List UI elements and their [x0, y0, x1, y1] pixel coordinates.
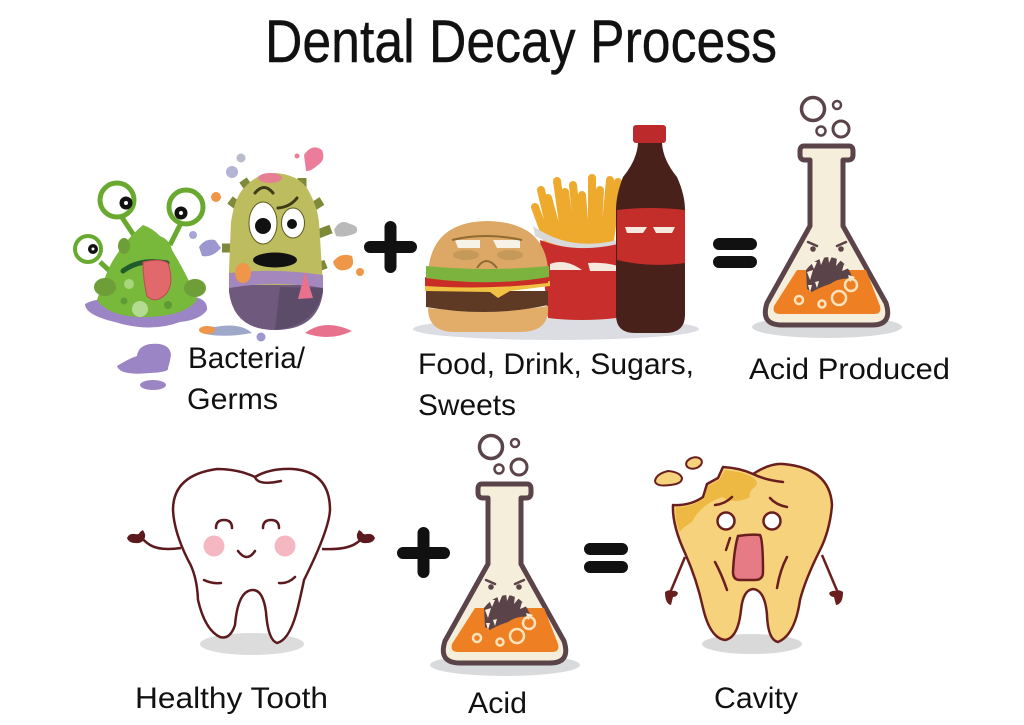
label: food, drink, sugars, sweets — [418, 348, 694, 422]
illustration: olive germ — [117, 147, 364, 390]
icon: plus sign — [370, 227, 411, 267]
title: Dental Decay Process — [265, 8, 777, 75]
illustration: healthy tooth — [127, 469, 375, 655]
label: acid: Acid — [468, 687, 527, 720]
label: cavity: Cavity — [714, 682, 798, 715]
label: acid produced: Acid Produced — [749, 353, 950, 386]
illustration: acid flask — [430, 436, 580, 676]
label: bacteria / germs: Germs — [187, 383, 278, 416]
illustration: cavity tooth — [655, 456, 843, 654]
illustration: acid flask — [752, 98, 902, 338]
label: food, drink, sugars, sweets: Sweets — [418, 389, 516, 422]
illustration: burger, fries and soda — [413, 125, 699, 340]
fries — [533, 178, 618, 320]
label: healthy tooth: Healthy Tooth — [135, 682, 328, 715]
label: bacteria / germs: Bacteria/ — [188, 342, 306, 375]
label: food, drink, sugars, sweets: Food, Drink, Sugars, — [418, 348, 694, 381]
icon: equals sign — [719, 244, 751, 262]
icon: plus sign — [403, 533, 444, 572]
soda bottle — [616, 125, 685, 333]
illustration: green germ — [75, 183, 207, 328]
icon: equals sign — [590, 549, 622, 567]
label: bacteria / germs — [187, 342, 306, 416]
burger — [425, 221, 550, 332]
